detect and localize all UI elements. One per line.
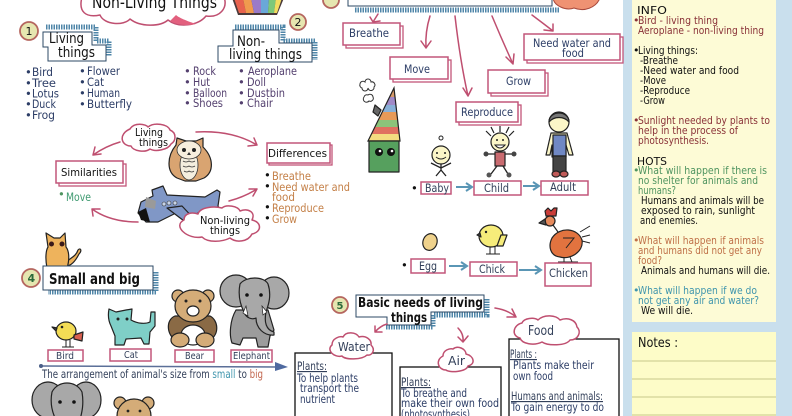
list: non-living examples: • <box>238 96 245 110</box>
heading: living things: Living <box>49 31 84 47</box>
number badge 3 <box>323 0 339 8</box>
cloud: living things <box>122 124 175 151</box>
box: move: Move <box>404 62 430 76</box>
box: reproduce <box>456 102 521 125</box>
icon: child <box>484 126 516 178</box>
cloud: non-living things: things <box>210 225 240 237</box>
differences list: Reproduce <box>272 201 324 215</box>
list: living examples: • <box>25 97 32 111</box>
need: food box: Humans and animals: <box>511 389 603 403</box>
arrows to needs <box>375 308 516 342</box>
list: living examples: • <box>25 65 32 79</box>
icon: chicken <box>539 208 590 262</box>
icon: adult <box>546 112 573 177</box>
list: non-living examples: Hut <box>193 75 210 89</box>
similarities list: Move <box>66 190 91 204</box>
cloud: living things: things <box>139 137 168 149</box>
arrow from plane to similarities <box>92 209 138 222</box>
list: non-living examples: • <box>238 75 245 89</box>
title cloud <box>81 0 225 25</box>
need: food box: Food <box>528 324 554 339</box>
hots text <box>633 155 770 317</box>
list: living examples: • <box>25 108 32 122</box>
similarities box: Similarities <box>61 166 117 179</box>
section 4: small and big <box>22 266 289 416</box>
arrow to differences <box>196 132 257 146</box>
need: water box: Water <box>338 340 370 354</box>
heading: non-living things: Non- <box>237 34 265 50</box>
heading: basic needs: things <box>391 311 427 326</box>
number badge 2: 2 <box>294 16 302 29</box>
section 3: characteristics of living things <box>323 0 623 286</box>
need: air box <box>400 347 501 416</box>
box: move <box>390 57 451 82</box>
hots text: not get any air and water? <box>638 294 759 307</box>
growth labels: chicken: • <box>401 258 408 272</box>
list: non-living examples: • <box>184 64 191 78</box>
hots text: humans? <box>638 184 676 197</box>
list: non-living examples: Chair <box>247 96 273 110</box>
info text: photosynthesis. <box>638 134 709 147</box>
info text: -Grow <box>640 94 665 107</box>
heading: non-living things <box>218 27 315 63</box>
icon: chick <box>477 225 507 254</box>
list: non-living examples: Aeroplane <box>248 64 297 78</box>
section 1: living things <box>20 22 132 122</box>
icon: teal cat <box>108 309 155 345</box>
growth labels: chicken <box>401 258 591 286</box>
info text: -Move <box>640 74 666 87</box>
info text: • <box>633 114 640 127</box>
need: air box: Air <box>448 354 465 368</box>
list: non-living examples: • <box>238 86 245 100</box>
need: air box: make their own food <box>401 396 499 410</box>
hots text: HOTS <box>637 155 667 168</box>
list: non-living examples: • <box>184 96 191 110</box>
icon: orange cat <box>46 233 81 268</box>
number badge 5: 5 <box>336 301 344 312</box>
info text: -Reproduce <box>640 84 690 97</box>
hots text: What will happen if animals <box>638 234 764 247</box>
differences list: • <box>264 211 271 225</box>
hots text: and enemies. <box>640 214 698 227</box>
section 2: non-living things <box>184 14 315 110</box>
differences list: • <box>264 179 271 193</box>
list: living examples: Frog <box>32 108 55 122</box>
box: need water and food: Need water and <box>533 36 611 50</box>
size labels: Bear <box>185 351 205 362</box>
need: air box: To breathe and <box>400 386 467 400</box>
cloud: non-living things <box>180 206 260 241</box>
size labels: Bird <box>56 351 74 362</box>
icon: rainbow cupcake <box>232 0 284 15</box>
need: food box: own food <box>513 369 553 383</box>
icon: lower elephant <box>32 382 101 416</box>
list: non-living examples: • <box>184 86 191 100</box>
heading: basic needs: Basic needs of living <box>358 296 483 311</box>
hots text: and humans did not get any <box>638 244 762 257</box>
need: food box: Plants make their <box>513 358 594 372</box>
icon: orange cloud <box>553 0 600 10</box>
need: food box: To gain energy to do <box>510 400 604 414</box>
hots text: Humans and animals will be <box>641 194 764 207</box>
heading: small and big: Small and big <box>49 270 140 288</box>
panel: info sidebar <box>623 0 792 416</box>
info text: Living things: <box>638 44 698 57</box>
list: living examples <box>25 64 132 122</box>
hots text: What will happen if there is <box>638 164 767 177</box>
info text: -Need water and food <box>640 64 739 77</box>
info text: Bird - living thing <box>638 14 718 27</box>
list: living examples: • <box>79 64 86 78</box>
hots text: • <box>633 234 640 247</box>
need: water box <box>295 333 392 416</box>
cloud: living things: Living <box>135 127 163 139</box>
info text: Aeroplane - non-living thing <box>638 24 764 37</box>
need: air box: Plants: <box>401 375 431 389</box>
number badge 4 <box>22 269 40 287</box>
icon: owl <box>169 138 211 181</box>
size scale arrow <box>39 362 288 371</box>
info text: • <box>633 44 640 57</box>
similarities box <box>56 161 126 186</box>
number badge 4: 4 <box>28 272 36 285</box>
arrows to characteristics <box>370 14 553 96</box>
growth labels: chicken: Chick <box>479 262 505 276</box>
heading: living things: things <box>58 45 95 61</box>
hots text: exposed to rain, sunlight <box>641 204 756 217</box>
section 5: basic needs of living things <box>295 295 619 416</box>
list: non-living examples: Shoes <box>193 96 223 110</box>
heading: basic needs <box>356 295 487 327</box>
arrow to similarities <box>93 142 120 155</box>
need: food box: Plants : <box>510 347 537 361</box>
info text: -Breathe <box>640 54 678 67</box>
hots text: What will happen if we do <box>638 284 757 297</box>
heading: living things <box>43 27 109 61</box>
list: non-living examples: Dustbin <box>247 86 285 100</box>
list: non-living examples <box>184 64 297 110</box>
growth labels: humans: Baby <box>425 181 449 195</box>
hots text: no shelter for animals and <box>638 174 758 187</box>
notes box: Notes : <box>638 336 678 351</box>
box: need water and food <box>524 34 623 63</box>
need: food box <box>509 316 619 416</box>
box: grow <box>488 70 548 96</box>
hots text: • <box>633 164 640 177</box>
need: water box: To help plants <box>296 371 358 385</box>
list: living examples: Tree <box>31 76 56 90</box>
list: living examples: • <box>25 76 32 90</box>
list: living examples: Flower <box>87 64 120 78</box>
hots text: • <box>633 284 640 297</box>
list: living examples: Butterfly <box>87 97 132 111</box>
differences box <box>267 143 332 165</box>
box: breathe <box>343 23 403 48</box>
differences list: Breathe <box>272 169 311 183</box>
similarities list: • <box>58 187 65 201</box>
info text: • <box>633 14 640 27</box>
heading bar <box>348 0 559 10</box>
differences list: food <box>272 190 295 204</box>
icon: teddy bear <box>168 290 217 347</box>
growth labels: chicken: Egg <box>419 259 437 273</box>
icon: aeroplane <box>138 186 222 224</box>
list: living examples: • <box>25 86 32 100</box>
list: non-living examples: • <box>238 64 245 78</box>
number badge 5 <box>332 297 348 313</box>
arrow from plane to differences <box>229 189 257 201</box>
size labels: Cat <box>124 350 138 361</box>
differences list <box>264 168 350 226</box>
hots text: food? <box>638 254 662 267</box>
diagram: similarities and differences <box>46 124 350 268</box>
list: non-living examples: Doll <box>247 75 266 89</box>
list: non-living examples: • <box>184 75 191 89</box>
heading: non-living things: living things <box>229 47 302 63</box>
icon: baby <box>431 136 451 176</box>
differences box: Differences <box>268 147 327 160</box>
growth labels: humans: • <box>411 181 418 195</box>
info text: help in the process of <box>638 124 739 137</box>
growth labels: humans: Adult <box>550 180 576 194</box>
size caption: The arrangement of animal's size from small to big <box>41 367 263 381</box>
icon: house <box>360 79 402 172</box>
need: water box: nutrient <box>300 392 335 406</box>
differences list: Grow <box>272 212 297 226</box>
growth labels: humans: Child <box>484 181 509 195</box>
box: reproduce: Reproduce <box>461 105 513 119</box>
list: living examples: Lotus <box>32 86 59 100</box>
list: living examples: • <box>79 97 86 111</box>
list: living examples: Bird <box>32 65 53 79</box>
cloud: non-living things: Non-living <box>200 215 250 227</box>
info text: INFO <box>637 4 667 17</box>
number badge 1: 1 <box>26 25 32 38</box>
icon: bird <box>52 322 83 347</box>
box: breathe: Breathe <box>349 26 389 40</box>
box: need water and food: food <box>562 46 584 60</box>
icon: egg <box>421 232 439 252</box>
size labels: Elephant <box>233 351 270 362</box>
hots text: We will die. <box>641 304 693 317</box>
need: water box: Plants: <box>297 359 327 373</box>
need: water box: transport the <box>300 381 359 395</box>
notes box <box>632 332 776 416</box>
icon: elephant <box>220 275 289 347</box>
list: non-living examples: Rock <box>193 64 216 78</box>
differences list: Need water and <box>272 180 350 194</box>
differences list: • <box>264 200 271 214</box>
list: living examples: Duck <box>32 97 56 111</box>
similarities list <box>58 187 91 204</box>
info text <box>633 4 770 147</box>
icon: lower bear <box>114 397 154 416</box>
list: living examples: Cat <box>87 75 104 89</box>
size labels <box>48 349 272 362</box>
list: living examples: • <box>79 75 86 89</box>
heading: small and big <box>43 266 156 292</box>
growth labels: chicken: Chicken <box>549 266 588 280</box>
list: living examples: Human <box>87 86 120 100</box>
differences list: • <box>264 168 271 182</box>
box: grow: Grow <box>506 74 531 88</box>
list: non-living examples: Balloon <box>193 86 227 100</box>
growth labels: humans <box>411 180 588 195</box>
list: living examples: • <box>79 86 86 100</box>
